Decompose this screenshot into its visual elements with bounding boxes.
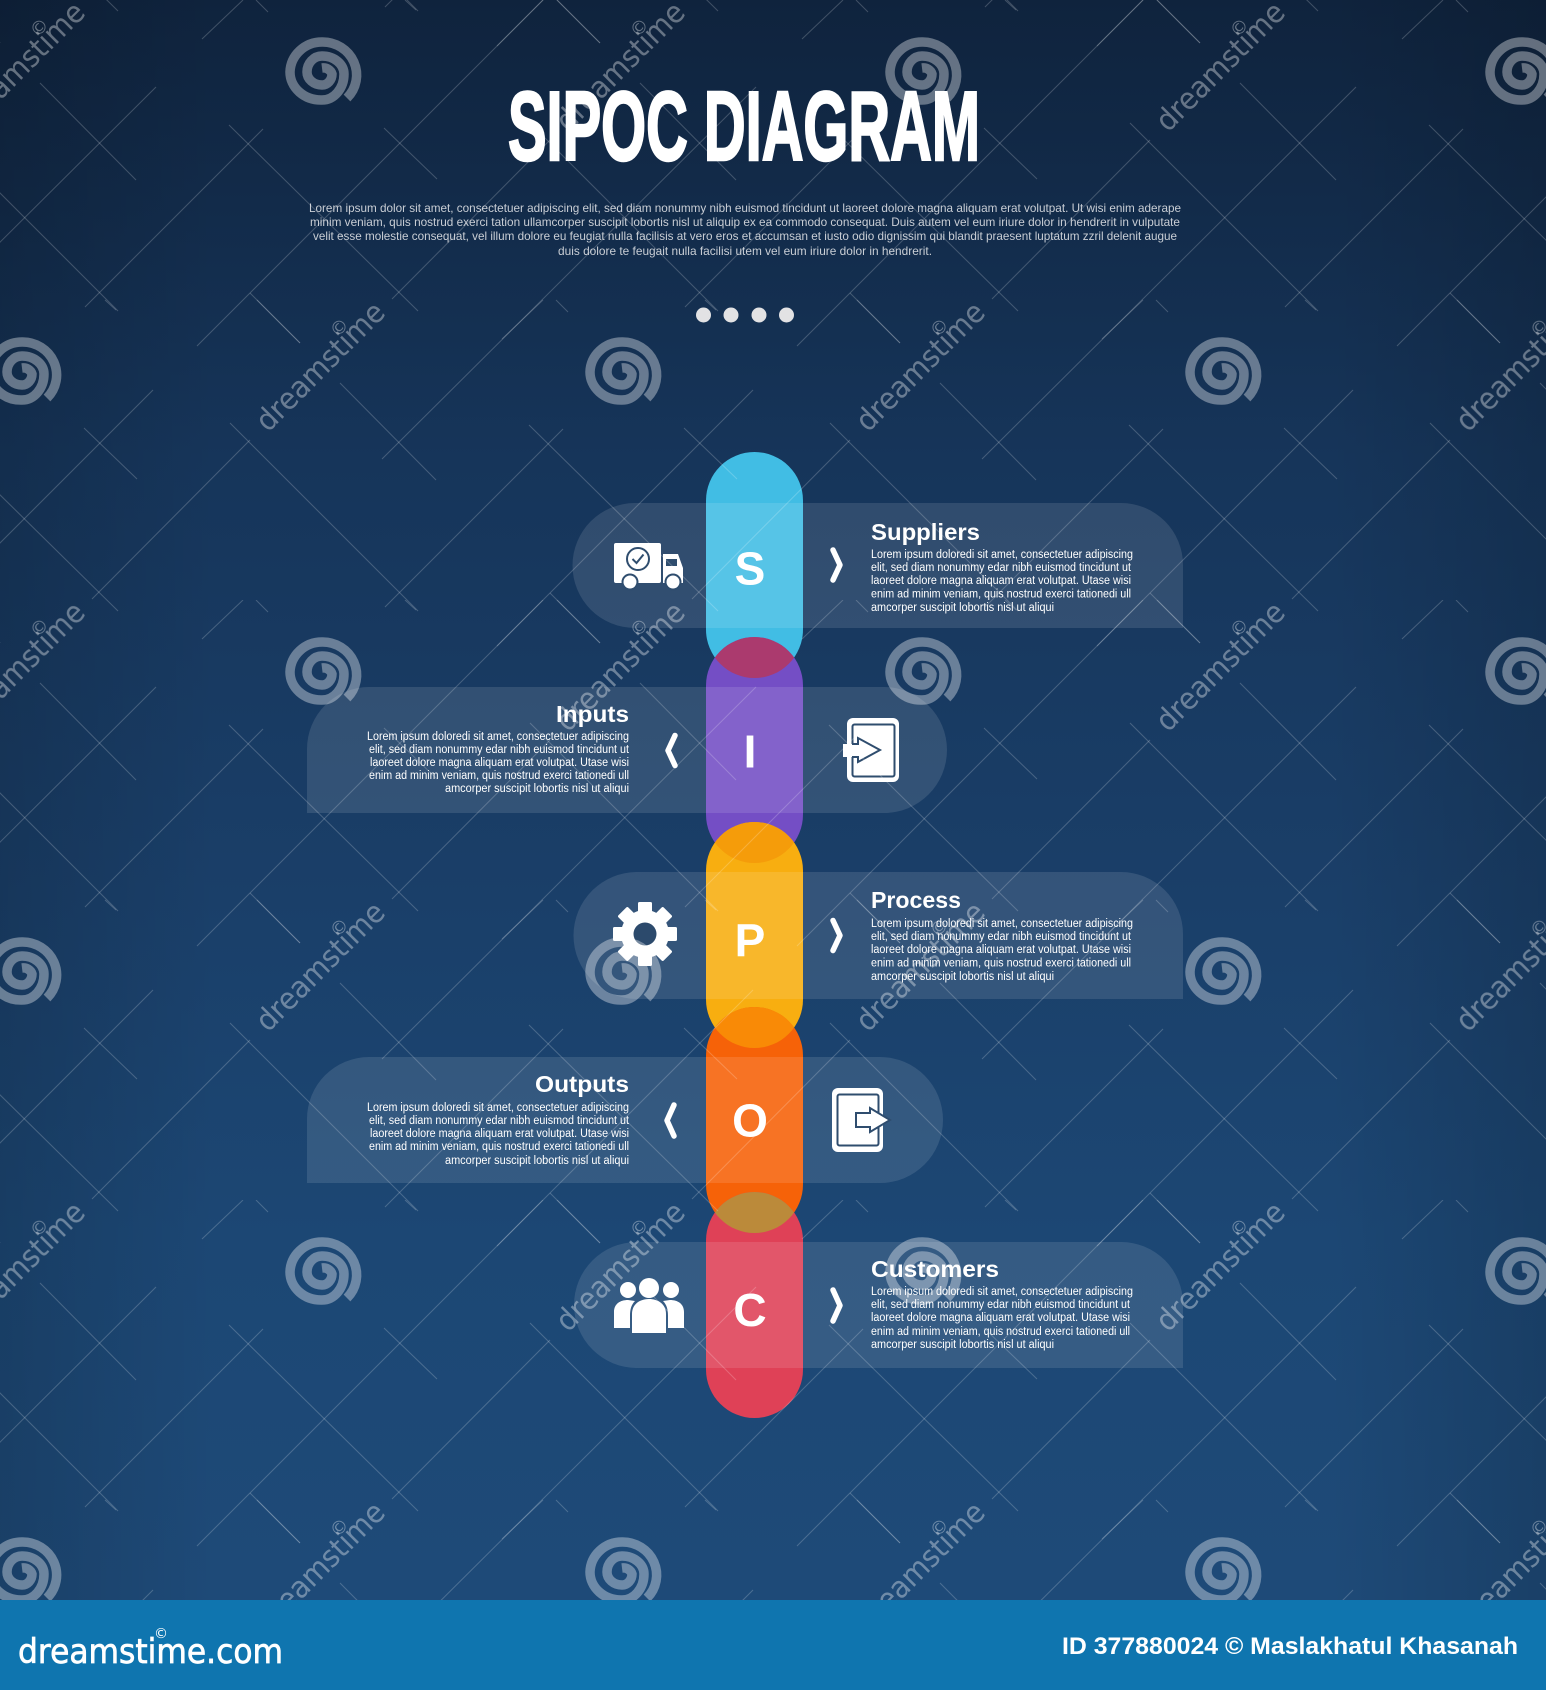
pill I [706, 637, 803, 863]
watermark text: dreamstime [849, 1495, 992, 1639]
heading: Process [871, 887, 961, 913]
body text: enim ad minim veniam, quis nostrud exerci tationedi ull [369, 1141, 629, 1153]
watermark text: © [326, 914, 354, 942]
icon: truck [614, 543, 683, 590]
footer bar [0, 1600, 1546, 1690]
watermark text: © [326, 314, 354, 342]
body text [871, 1286, 1133, 1351]
body text: elit, sed diam nonummy edar nibh euismod tincidunt ut [871, 562, 1132, 574]
pill S [706, 452, 803, 678]
body text: Lorem ipsum doloredi sit amet, consectetuer adipiscing [367, 731, 629, 743]
pill O [706, 1007, 803, 1233]
body text: amcorper suscipit lobortis nisl ut aliqui [445, 1155, 629, 1167]
watermark text: © [26, 1214, 54, 1242]
body text: amcorper suscipit lobortis nisl ut aliqui [871, 602, 1054, 614]
watermark text: © [926, 914, 954, 942]
body text: elit, sed diam nonummy edar nibh euismod tincidunt ut [871, 1299, 1131, 1311]
chevron right [833, 920, 840, 950]
pill C [706, 1192, 803, 1418]
watermark text: © [26, 14, 54, 42]
watermark text: © [1226, 614, 1254, 642]
letter C: C [733, 1284, 767, 1336]
letter P: P [735, 914, 765, 966]
letter S: S [735, 542, 765, 594]
intro text block: duis dolore te feugait nulla facilisi utem vel eum iriure dolor in hendrerit. [558, 244, 932, 258]
watermark text: dreamstime [249, 295, 392, 439]
body text: Lorem ipsum doloredi sit amet, consectetuer adipiscing [871, 549, 1133, 561]
body text: laoreet dolore magna aliquam erat volutpat. Utase wisi [871, 575, 1131, 587]
heading: Outputs [535, 1071, 629, 1097]
title: SIPOC DIAGRAM [508, 71, 980, 181]
overlap P and O [715, 1007, 794, 1048]
vertical SIPOC pill chain [706, 452, 803, 1418]
icon: output arrow [832, 1088, 890, 1152]
body text: enim ad minim veniam, quis nostrud exerci tationedi ull [871, 958, 1131, 970]
body text: enim ad minim veniam, quis nostrud exerci tationedi ull [871, 1326, 1130, 1338]
watermark text: dreamstime [249, 895, 392, 1039]
icon: people [614, 1278, 684, 1333]
overlap S and I [715, 637, 794, 678]
footer logo: dreamstime.com [18, 1632, 283, 1672]
chevron left [667, 1105, 674, 1136]
chevron right [833, 1290, 840, 1321]
body text: enim ad minim veniam, quis nostrud exerci tationedi ull [369, 770, 629, 782]
footer logo mark: © [154, 1626, 168, 1642]
body text: laoreet dolore magna aliquam erat volutpat. Utase wisi [871, 944, 1131, 956]
watermark text: © [26, 614, 54, 642]
body text [367, 1102, 630, 1167]
watermark text: dreamstime [849, 295, 992, 439]
body text: laoreet dolore magna aliquam erat volutpat. Utase wisi [370, 1128, 629, 1140]
watermark text: dreamstime [249, 1495, 392, 1639]
watermark text: © [1226, 1214, 1254, 1242]
intro text block [309, 201, 1181, 258]
watermark text: dreamstime [1149, 1195, 1292, 1339]
watermark text: © [926, 314, 954, 342]
customers bar [574, 1242, 1183, 1368]
watermark text: dreamstime [1149, 595, 1292, 739]
body text [367, 731, 630, 795]
body text: Lorem ipsum doloredi sit amet, consectetuer adipiscing [367, 1102, 629, 1114]
suppliers bar [573, 503, 1183, 628]
icon: input arrow [843, 718, 899, 782]
body text: Lorem ipsum doloredi sit amet, consectetuer adipiscing [871, 1286, 1133, 1298]
intro text block: velit esse molestie consequat, vel illum dolore eu feugiat nulla facilisis at vero eros et accumsan et iusto odio dignissim qui blandit praesent luptatum zzril delenit augue [313, 229, 1177, 243]
watermark text: © [926, 1514, 954, 1542]
watermark text: © [326, 1514, 354, 1542]
intro text block: minim veniam, quis nostrud exerci tation ullamcorper suscipit lobortis nisl ut aliquip ex ea commodo consequat. Duis autem vel eum iriure dolor in hendrerit in vulputate [310, 215, 1180, 229]
process bar [574, 872, 1183, 999]
overlap I and P [715, 822, 794, 863]
pill P [706, 822, 803, 1048]
letter I: I [744, 726, 756, 778]
footer credit: ID 377880024 © Maslakhatul Khasanah [1062, 1633, 1518, 1660]
body text: laoreet dolore magna aliquam erat volutpat. Utase wisi [871, 1312, 1130, 1324]
letter O: O [732, 1094, 768, 1146]
watermark text: © [626, 614, 654, 642]
overlap O and C [715, 1192, 794, 1233]
watermark text: dreamstime [849, 895, 992, 1039]
chevron right [833, 550, 840, 580]
watermark text: © [1226, 14, 1254, 42]
body text [871, 918, 1133, 983]
body text [871, 549, 1133, 614]
inputs bar [307, 687, 947, 813]
heading: Suppliers [871, 519, 980, 545]
body text: elit, sed diam nonummy edar nibh euismod tincidunt ut [871, 931, 1132, 943]
watermark text: dreamstime [549, 1195, 692, 1339]
panel: suppliers [573, 503, 1183, 628]
watermark text: dreamstime [549, 595, 692, 739]
intro text block: Lorem ipsum dolor sit amet, consectetuer adipiscing elit, sed diam nonummy nibh euismod tincidunt ut laoreet dolore magna aliquam erat volutpat. Ut wisi enim aderape [309, 201, 1181, 215]
panel: outputs [307, 1057, 943, 1183]
pagination dots [696, 308, 794, 322]
watermark text: © [626, 1214, 654, 1242]
watermark text: © [626, 14, 654, 42]
panel: customers [574, 1242, 1183, 1368]
chevron left [668, 736, 675, 766]
body text: enim ad minim veniam, quis nostrud exerci tationedi ull [871, 588, 1131, 600]
body text: amcorper suscipit lobortis nisl ut aliqui [871, 971, 1054, 983]
outputs bar [307, 1057, 943, 1183]
icon: gear [613, 902, 677, 966]
panel: process [574, 872, 1183, 999]
heading: Customers [871, 1256, 999, 1282]
body text: Lorem ipsum doloredi sit amet, consectetuer adipiscing [871, 918, 1133, 930]
panel: inputs [307, 687, 947, 813]
body text: elit, sed diam nonummy edar nibh euismod tincidunt ut [369, 1115, 630, 1127]
body text: elit, sed diam nonummy edar nibh euismod tincidunt ut [369, 744, 630, 756]
body text: amcorper suscipit lobortis nisl ut aliqui [871, 1339, 1054, 1351]
heading: Inputs [556, 701, 629, 727]
body text: laoreet dolore magna aliquam erat volutpat. Utase wisi [370, 757, 629, 769]
body text: amcorper suscipit lobortis nisl ut aliqui [445, 783, 629, 795]
